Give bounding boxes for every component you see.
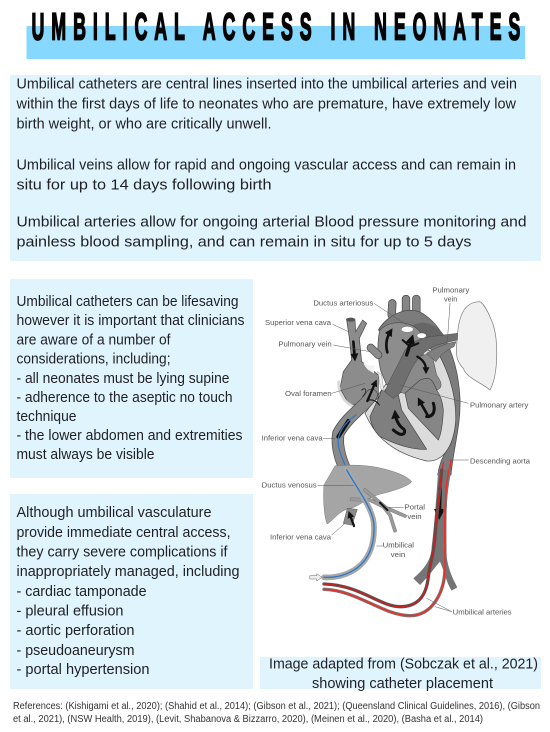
image caption [260,656,541,692]
panel: complications: - portal hypertension [16,661,150,678]
lower labels: Ductus venosus [262,483,317,490]
diagram: liver, umbilical vessels and catheters: Umbilical [383,543,414,550]
diagram: liver, umbilical vessels and catheters: vein [391,552,405,559]
panel: complications: - cardiac tamponade [16,583,146,600]
diagram: heart and lung: Superior vena cava [265,320,331,327]
title banner: UMBILICAL ACCESS IN NEONATES [32,6,520,48]
image caption: showing catheter placement [312,675,494,692]
panel: complications: provide immediate central access, [16,524,230,541]
right ventricle lobe [370,390,427,449]
diagram: fetal circulation with catheter placement [262,287,530,616]
portal vein [352,490,405,531]
heart labels: Ductus arteriosus [313,301,374,308]
flow arrows [353,342,355,357]
panel: introduction [10,75,541,261]
references [13,701,540,725]
panel: clinician considerations: technique [16,408,76,425]
diagram: liver, umbilical vessels and catheters: Portal [404,505,426,512]
diagram: heart and lung: vein [444,297,457,304]
panel: introduction: birth weight, or who are critically unwell. [16,116,272,132]
left ventricle [385,353,441,393]
image caption: Image adapted from (Sobczak et al., 2021) [269,656,538,672]
panel: complications: - pseudoaneurysm [16,642,134,659]
umbilical arteries with red catheters [324,470,442,607]
diagram: heart and lung: Pulmonary vein [278,342,332,349]
lower label leaders [318,486,452,612]
pulmonary artery [385,333,457,398]
panel: introduction: Umbilical veins allow for rapid and ongoing vascular access and can remain in [16,156,516,174]
panel: clinician considerations: must always be visible [16,446,154,463]
panel: complications: - pleural effusion [16,602,124,620]
heart label leaders [323,303,468,460]
liver [324,465,412,524]
lower aorta [413,470,457,591]
blue catheter upper segment [338,415,356,475]
panel: clinician considerations: - adherence to the aseptic no touch [16,389,232,406]
panel: clinician considerations: Umbilical catheters can be lifesaving [16,293,238,310]
panel: clinician considerations: - the lower abdomen and extremities [16,427,242,444]
diagram: heart and lung: Inferior vena cava [262,436,323,443]
left atrium [378,323,423,385]
panel: clinician considerations: however it is important that clinicians [16,312,244,329]
diagram: liver, umbilical vessels and catheters: Umbilical arteries [453,609,512,616]
panel: clinician considerations: considerations, including; [16,350,170,368]
diagram: liver, umbilical vessels and catheters [262,465,512,616]
panel: complications: Although umbilical vasculature [16,504,212,521]
panel: introduction: Umbilical catheters are central lines inserted into the umbilical arteries and vein [16,76,517,92]
panel: complications: - aortic perforation [16,622,134,639]
left ventricle lobe [405,378,443,440]
panel: clinician considerations: are aware of a number of [16,332,171,348]
diagram: heart and lung: Pulmonary [432,287,470,294]
panel: introduction: painless blood sampling, and can remain in situ for up to 5 days [16,234,472,250]
panel: complications: inappropriately managed, including [16,563,240,580]
inferior vena cava lower [343,508,357,525]
red catheters upper segment [442,460,451,475]
diagram: liver, umbilical vessels and catheters: Inferior vena cava [270,534,331,541]
pulmonary vein stub [371,348,378,355]
panel: introduction: Umbilical arteries allow for ongoing arterial Blood pressure monitoring and [16,214,526,230]
heart outer wall [365,347,456,461]
ductus openings [401,326,413,332]
aorta arch and descending aorta [378,310,460,475]
inferior vena cava [338,395,372,475]
superior vena cava and right atrium [340,320,378,407]
lung [456,302,497,390]
diagram: heart and lung: Pulmonary artery [470,402,529,409]
panel: clinician considerations [10,279,253,478]
panel: introduction: within the first days of life to neonates who are premature, have extremely low [16,96,516,112]
great vessels stubs [392,299,416,315]
diagram: heart and lung: Oval foramen [285,391,332,398]
umbilical vein with blue catheter [324,470,374,577]
insertion arrow [310,574,322,581]
diagram: heart and lung: Descending aorta [470,459,530,466]
diagram: heart and lung [262,287,530,475]
panel: introduction: situ for up to 14 days following birth [16,176,272,194]
diagram: liver, umbilical vessels and catheters: vein [407,514,422,521]
panel: complications [10,494,253,689]
panel: clinician considerations: - all neonates must be lying supine [16,370,230,387]
panel: complications: they carry severe complications if [16,544,228,560]
references: et al., 2021), (NSW Health, 2019), (Levit, Shabanova & Bizzarro, 2020), (Meinen et al., 2020), (Basha et al., 2014) [13,714,483,725]
